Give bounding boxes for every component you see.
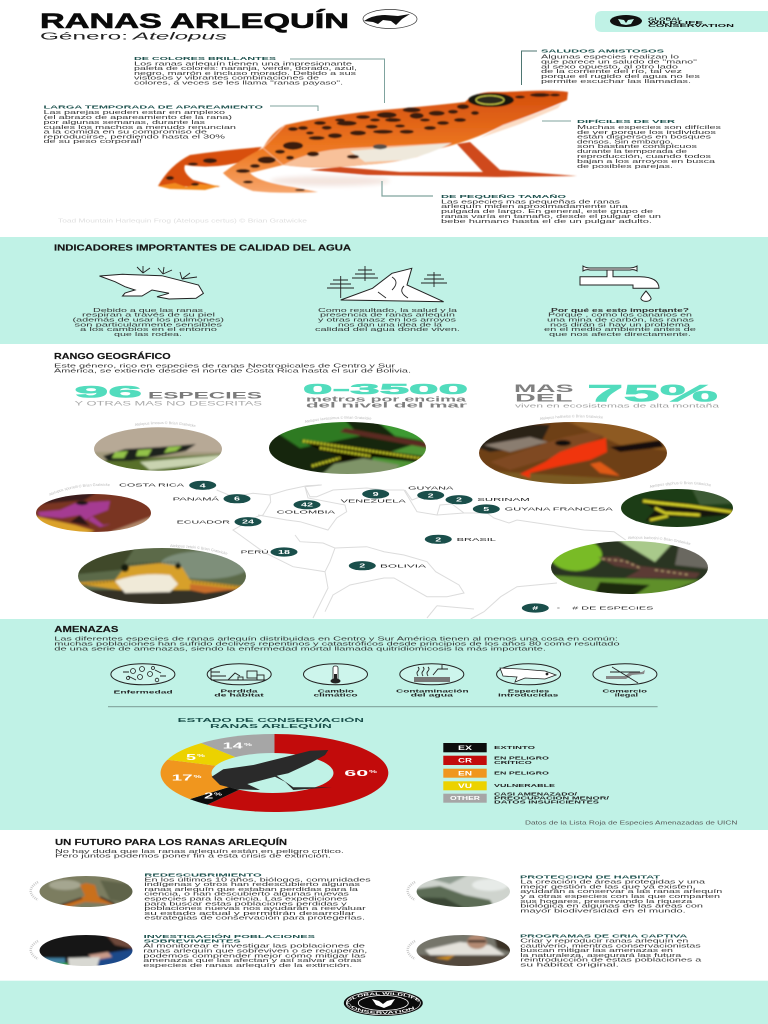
text: column 3: una mina de carbón, las ranas xyxy=(547,318,695,324)
callout: difíciles de ver: durante la temporada de xyxy=(577,149,687,155)
legend: conservation categories: EN PELIGRO xyxy=(494,756,550,760)
threat labels: Especies xyxy=(508,688,550,694)
stat: 0-3500 metros: 0-3500 xyxy=(303,381,468,398)
photo: purple frog: Atelopus spurrelli © Brian Gratwicke xyxy=(50,483,110,496)
logo: round seal: GLOBAL WILDLIFE xyxy=(347,992,420,1002)
text: redescubrimiento: especies para la ciencia. Las expediciones xyxy=(144,896,349,902)
callout: difíciles de ver: de posibles parejas. xyxy=(577,164,673,170)
stat: más del 75%: DEL xyxy=(515,392,573,404)
photo: misty forest xyxy=(406,876,510,907)
callout: difíciles de ver: están dispersos en bosques xyxy=(577,135,712,141)
percentage labels: 60 xyxy=(344,768,369,778)
stat: 96 especies: Y OTRAS MAS NO DESCRITAS xyxy=(74,401,263,408)
photo: green and black frog xyxy=(94,421,222,471)
text: column 2: Como resultado, la salud y la xyxy=(318,308,457,314)
stat: 0-3500 metros xyxy=(303,381,468,410)
text: investigación poblaciones sobrevivientes: SOBREVIVIENTES xyxy=(144,938,241,943)
threat labels: del agua xyxy=(411,693,454,699)
map labels and species count pins: BOLIVIA xyxy=(380,564,428,570)
callout: de colores brillantes: colores, a veces se les llama "ranas payaso". xyxy=(134,80,343,86)
text: protección de hábitat: La creación de áreas protegidas y una xyxy=(520,880,705,886)
legend: conservation categories: CR xyxy=(458,758,473,765)
pin: guyana francesa xyxy=(473,504,500,514)
pin: ecuador xyxy=(234,517,262,526)
percentage labels: % xyxy=(244,742,252,747)
callout: de pequeño tamaño: Las especies mas pequeñas de ranas xyxy=(441,199,621,205)
legend: conservation categories: VU xyxy=(458,783,473,790)
text: range description xyxy=(54,363,411,374)
pin: brasil: 2 xyxy=(435,537,441,543)
threat labels: Cambio xyxy=(318,688,354,694)
text: column 3: que nos afecte directamente. xyxy=(549,332,691,338)
threat labels xyxy=(114,688,647,699)
callout: saludos amistosos: porque el rugido del agua no les xyxy=(541,74,701,80)
pin: venezuela xyxy=(362,489,389,499)
text: column 1: (además de usar los pulmones) xyxy=(72,318,225,324)
logo badge: Global Wildlife Conservation: CONSERVATION xyxy=(648,23,734,28)
callout: larga temporada de apareamiento: a la comida en su compromiso de xyxy=(44,130,207,136)
photo caption: Toad Mountain Harlequin Frog (Atelopus certus) © Brian Gratwicke xyxy=(58,218,307,225)
stat: 0-3500 metros: metros por encima xyxy=(306,395,468,404)
pin: colombia: 42 xyxy=(301,503,313,509)
map of Central and South America xyxy=(217,485,626,619)
chart heading: ESTADO DE CONSERVACIÓN xyxy=(178,716,364,724)
pin: surinam: 2 xyxy=(456,498,462,504)
map labels and species count pins xyxy=(119,481,653,613)
photo: red bellied frog: Atelopus halihelos © Brian Gratwicke xyxy=(540,414,603,420)
threat labels: Comercio xyxy=(602,688,647,694)
title: Género: xyxy=(40,30,128,42)
icon: especies introducidas xyxy=(497,664,561,685)
pin: perú: 18 xyxy=(278,550,290,556)
threat labels: de hábitat xyxy=(214,693,265,699)
pin: colombia xyxy=(294,500,320,509)
text: redescubrimiento: REDESCUBRIMIENTO xyxy=(144,872,263,877)
text: programas de cría captiva: Criar y reproducir ranas arlequín en xyxy=(520,939,689,945)
text: column 3 xyxy=(544,308,696,338)
chart heading: RANAS ARLEQUÍN xyxy=(210,722,332,730)
pin: bolivia xyxy=(349,561,376,570)
text: protección de hábitat: mayor biodiversidad en el mundo. xyxy=(520,908,686,914)
callout: difíciles de ver: reproducción, cuando todos xyxy=(577,154,712,160)
donut chart: conservation status xyxy=(161,734,388,812)
map labels and species count pins: BRASIL xyxy=(457,537,497,543)
text: column 1: que las rodea. xyxy=(114,332,182,338)
map labels and species count pins: ECUADOR xyxy=(177,519,231,525)
text: investigación poblaciones sobrevivientes: ranas arlequín que sobreviven o se recuperan, xyxy=(143,948,367,954)
pin: bolivia: 2 xyxy=(359,564,365,570)
icon: frog breathing through skin xyxy=(100,266,203,299)
text: investigación poblaciones sobrevivientes: especies de ranas arlequín de la extinción. xyxy=(143,963,352,969)
threat labels: climático xyxy=(314,693,358,699)
stat: más del 75%: 75% xyxy=(587,381,719,408)
icon: frog in oval xyxy=(363,10,417,28)
percentage labels xyxy=(172,740,377,800)
source note: Datos de la Lista Roja de Especies Amenazadas de UICN xyxy=(525,821,738,827)
text: threats intro: de una serie de amenazas, siendo la enfermedad mortal llamada quitridiomicosis la más importante. xyxy=(54,646,546,652)
text: future intro xyxy=(55,849,344,860)
icon: cambio climático xyxy=(304,664,368,685)
pin: perú xyxy=(270,547,298,557)
text: column 2 xyxy=(315,308,460,333)
callout: de pequeño tamaño: arlequín miden aproximadamente una xyxy=(441,204,628,210)
stat: más del 75%: viven en ecosistemas de alta montaña xyxy=(515,403,721,409)
text: investigación poblaciones sobrevivientes: amenazas que las afectan y así salvar a otras xyxy=(143,958,363,964)
pin: costa rica: 4 xyxy=(200,483,207,489)
panel: footer xyxy=(0,980,768,1024)
callout: de colores brillantes: vistosos y vibrantes combinaciones de xyxy=(134,76,319,82)
text: investigación poblaciones sobrevivientes: Al monitorear e investigar las poblaciones de xyxy=(143,944,365,950)
map labels and species count pins: VENEZUELA xyxy=(341,499,408,505)
pin: panamá xyxy=(224,494,250,503)
text: programas de cría captiva: cautiverio, mientras conservacionistas xyxy=(520,944,702,950)
photo: red bellied frog xyxy=(479,414,667,484)
callout: difíciles de ver xyxy=(577,117,722,170)
legend: conservation categories: VULNERABLE xyxy=(494,783,555,788)
legend: number of species: = xyxy=(557,606,560,611)
photo: yellow striped frog: Atelopus glyphus © Brian Gratwicke xyxy=(650,481,711,488)
callout: de colores brillantes: DE COLORES BRILLANTES xyxy=(134,56,276,61)
heading: indicadores: INDICADORES IMPORTANTES DE CALIDAD DEL AGUA xyxy=(54,243,351,253)
callout: larga temporada de apareamiento: Las parejas pueden estar en amplexo xyxy=(44,110,225,116)
text: future intro: No hay duda que las ranas arlequín están en peligro crítico. xyxy=(55,849,344,855)
threat labels: introducidas xyxy=(498,693,559,699)
logo badge: Global Wildlife Conservation xyxy=(595,11,768,32)
callout: de colores brillantes: negro, marrón e incluso morado. Debido a sus xyxy=(134,71,357,77)
photo: golden frog: Atelopus zeteki © Brian Gratwicke xyxy=(170,544,228,555)
percentage labels: % xyxy=(214,792,222,796)
callout: saludos amistosos: al sexo opuesto, al otro lado xyxy=(541,64,678,70)
photo: yellow striped frog xyxy=(621,481,733,527)
logo: round seal: CONSERVATION xyxy=(346,1002,414,1014)
panel: water quality indicators xyxy=(0,237,768,344)
callout: de colores brillantes: paleta de colores: naranja, verde, dorado, azul, xyxy=(134,66,357,72)
callout: difíciles de ver: Muchas especies son difíciles xyxy=(577,125,722,131)
callout: de colores brillantes xyxy=(134,56,357,86)
frog silhouette xyxy=(212,750,332,790)
text: column 3: nos dirán si hay un problema xyxy=(550,322,690,328)
photo: rediscovered frog on rock xyxy=(30,876,132,907)
text: column 2: y otras ranasz en los arroyos xyxy=(318,318,457,324)
text: redescubrimiento: su estado actual y permitirán desarrollar xyxy=(144,911,356,917)
leader lines xyxy=(270,51,571,196)
text: protección de hábitat: sus hogares, preservando la riqueza xyxy=(520,899,693,905)
stat: más del 75%: MAS xyxy=(514,383,574,395)
callout: saludos amistosos: Algunas especies realizan lo xyxy=(541,55,679,61)
legend: conservation categories: EN PELIGRO xyxy=(494,770,550,775)
legend: conservation categories: OTHER xyxy=(450,796,481,802)
main frog illustration xyxy=(158,91,577,193)
callout: de pequeño tamaño xyxy=(441,193,661,225)
title xyxy=(40,10,349,42)
photo: golden frog xyxy=(78,544,246,604)
legend: conservation categories: EX xyxy=(458,745,473,752)
stat: 0-3500 metros: del nivel del mar xyxy=(306,400,467,410)
callout: difíciles de ver: son bastante conspicuos xyxy=(577,144,698,150)
frog spots xyxy=(166,93,560,191)
pin: panamá: 6 xyxy=(234,497,240,503)
text: redescubrimiento: poblaciones nuevas nos ayudarán a reevaluar xyxy=(144,906,366,912)
text: redescubrimiento: En los últimos 10 años, biólogos, comunidades xyxy=(144,877,372,883)
callout: de pequeño tamaño: pulgada de largo. En general, este grupo de xyxy=(441,209,653,215)
pin: guyana francesa: 5 xyxy=(483,507,489,513)
heading: rango geográfico: RANGO GEOGRÁFICO xyxy=(54,350,171,361)
callout: saludos amistosos: permite escuchar las llamadas. xyxy=(541,79,691,85)
icon: contaminación del agua xyxy=(400,664,464,685)
legend: conservation categories xyxy=(443,743,611,804)
legend: conservation categories: EXTINTO xyxy=(494,745,536,750)
text: programas de cría captiva: PROGRAMAS DE CRIA CAPTIVA xyxy=(520,934,689,939)
percentage labels: % xyxy=(194,774,202,779)
text: column 1 xyxy=(72,308,225,338)
percentage labels: % xyxy=(197,753,205,758)
callout: larga temporada de apareamiento: por algunas semanas, durante las xyxy=(44,120,206,126)
stat: 96 especies: ESPECIES xyxy=(148,390,262,401)
map labels and species count pins: COLOMBIA xyxy=(277,510,337,516)
panel: threats and conservation status xyxy=(0,619,768,830)
icon: river and trees xyxy=(327,266,447,302)
callout: larga temporada de apareamiento xyxy=(44,104,264,145)
text: redescubrimiento: ciencia, o han descubierto algunas nuevas xyxy=(144,892,350,898)
text: investigación poblaciones sobrevivientes: podemos comprender mejor cómo mitigar las xyxy=(143,953,367,959)
percentage labels: % xyxy=(369,769,377,774)
percentage labels: 5 xyxy=(186,752,197,762)
text: protección de hábitat: PROTECCION DE HABITAT xyxy=(520,875,660,880)
stat: 96 especies xyxy=(74,382,263,408)
text: column 1: a los cambios en el entorno xyxy=(80,327,217,333)
text: investigación poblaciones sobrevivientes: INVESTIGACIÓN POBLACIONES xyxy=(144,932,315,939)
pin: venezuela: 9 xyxy=(373,492,379,498)
text: range description: Este género, rico en especies de ranas Neotropicales de Centro y Sur xyxy=(54,363,396,369)
threat labels: Enfermedad xyxy=(114,690,173,696)
legend: conservation categories: DATOS INSUFICIENTES xyxy=(494,800,599,804)
callout: difíciles de ver: densos. Sin embargo, xyxy=(577,140,673,146)
logo: round seal xyxy=(344,990,423,1016)
logo badge: Global Wildlife Conservation: WILDLIFE xyxy=(648,20,703,25)
text: threats intro: muchas poblaciones han sufrido declives repentinos y catastróficos desde principios de los años 80 como resultado xyxy=(54,642,620,648)
map labels and species count pins: PERÚ xyxy=(241,548,270,555)
text: range description: América, se extiende desde el norte de Costa Rica hasta el sur de Bolivia. xyxy=(54,368,411,374)
legend: conservation categories: CASI AMENAZADO/ xyxy=(494,792,578,797)
photo: green and black frog: Atelopus limosus © Brian Gratwicke xyxy=(135,421,196,427)
callout: difíciles de ver: bajan a los arroyos en busca xyxy=(577,159,715,165)
text: protección de hábitat: mejor gestión de las que ya existen, xyxy=(520,884,696,890)
pin: ecuador: 24 xyxy=(242,520,256,526)
percentage labels: 14 xyxy=(223,740,243,750)
text: column 2: calidad del agua donde viven. xyxy=(315,327,460,333)
callout: saludos amistosos: que parece un saludo de "mano" xyxy=(541,60,697,66)
stat: más del 75% xyxy=(514,381,721,409)
map labels and species count pins: PANAMÁ xyxy=(173,495,221,502)
text: programas de cría captiva: su hábitat original. xyxy=(520,962,619,968)
callout: larga temporada de apareamiento: (el abrazo de apareamiento de la rana) xyxy=(44,115,233,121)
legend: number of species: # xyxy=(532,606,540,612)
text: redescubrimiento: estrategias de conservación para protegerlas. xyxy=(144,916,365,922)
callout: larga temporada de apareamiento: reproducirse, perdiendo hasta el 30% xyxy=(44,134,226,140)
callout: difíciles de ver: DIFÍCILES DE VER xyxy=(577,117,676,124)
text: redescubrimiento xyxy=(144,872,372,922)
map labels and species count pins: GUYANA xyxy=(408,485,455,491)
chart heading xyxy=(178,716,364,730)
text: programas de cría captiva xyxy=(520,934,702,968)
percentage labels: 17 xyxy=(172,773,193,783)
callout: saludos amistosos xyxy=(541,49,701,85)
text: redescubrimiento: indígenas y otros han redescubierto algunas xyxy=(144,882,361,888)
stat: 96 especies: 96 xyxy=(74,382,142,401)
logo badge: Global Wildlife Conservation: GLOBAL xyxy=(648,16,682,22)
text: protección de hábitat: biológica en algunas de las áreas con xyxy=(520,904,703,910)
text: threats intro: Las diferentes especies de ranas arlequín distribuidas en Centro y Sur América tienen al menos una cosa en común: xyxy=(54,637,618,643)
pin: guyana xyxy=(417,491,444,500)
text: column 1: Debido a que las ranas xyxy=(93,308,204,314)
callout: de pequeño tamaño: bebe humano hasta el de un pulgar adulto. xyxy=(441,219,652,225)
heading: un futuro: UN FUTURO PARA LOS RANAS ARLEQUÍN xyxy=(55,837,287,847)
map labels and species count pins: COSTA RICA xyxy=(119,483,186,489)
pin: brasil xyxy=(425,535,452,544)
callout: difíciles de ver: de ver porque los individuos xyxy=(577,130,717,136)
legend: conservation categories: PREOCUPACIÓN MENOR/ xyxy=(494,794,611,800)
text: investigación poblaciones sobrevivientes xyxy=(143,932,367,969)
text: column 1: respiran a través de su piel xyxy=(82,313,215,319)
photo: captive breeding keeper xyxy=(406,935,510,966)
text: column 1: son particularmente sensibles xyxy=(74,322,223,328)
text: column 3: Porque , como los canarios en xyxy=(548,313,692,319)
callout: saludos amistosos: de la corriente del río, tal vez xyxy=(541,69,683,75)
icon: comercio ilegal xyxy=(593,664,657,685)
threat labels: ilegal xyxy=(615,693,638,699)
percentage labels: 2 xyxy=(204,790,214,800)
text: programas de cría captiva: buscan mitigar las amenazas en xyxy=(520,948,673,954)
text: column 3: Por qué es esto importante? xyxy=(551,308,689,314)
callout: de colores brillantes: Los ranas arlequín tienen una impresionante xyxy=(134,61,352,67)
text: protección de hábitat: y a otras especies con las que comparten xyxy=(520,894,720,900)
legend: conservation categories: CRÍTICO xyxy=(494,758,533,765)
pin: guyana: 2 xyxy=(428,493,434,499)
threat labels: Perdida xyxy=(220,688,258,694)
pin: costa rica xyxy=(189,481,216,490)
text: future intro: Pero juntos podemos poner fin a esta crisis de extinción. xyxy=(55,854,331,860)
photo: black frog with yellow dots xyxy=(269,416,426,474)
legend: conservation categories: EN xyxy=(458,770,473,778)
legend: number of species xyxy=(522,603,653,613)
heading: amenazas: AMENAZAS xyxy=(54,624,119,634)
photo: brown frog on leaves: Atelopus barbotini © Brian Gratwicke xyxy=(628,536,690,545)
text: programas de cría captiva: reintroducción de estas poblaciones a xyxy=(520,958,702,964)
text: column 2: nos dan una idea de la xyxy=(338,322,442,328)
text: column 2: presencia de ranas arlequín xyxy=(320,313,455,319)
title: RANAS ARLEQUÍN xyxy=(40,10,349,33)
photo: brown frog on leaves xyxy=(551,536,708,594)
photo: purple frog xyxy=(36,483,151,532)
text: protección de hábitat: ayudarán a conservar a las ranas arlequín xyxy=(520,889,723,895)
icon: pérdida de hábitat xyxy=(207,664,271,685)
title: Atelopus xyxy=(131,30,229,42)
icon: dripping tap xyxy=(580,266,659,301)
pin: surinam xyxy=(446,495,472,504)
callout: de pequeño tamaño: ranas varía en tamaño, desde el pulgar de un xyxy=(441,214,661,220)
photo: researcher monitoring xyxy=(30,935,132,966)
threat labels: Contaminación xyxy=(396,688,469,694)
frog eye xyxy=(468,93,514,107)
text: threats intro xyxy=(54,637,620,652)
map labels and species count pins: SURINAM xyxy=(477,497,530,503)
text: redescubrimiento: para buscar estas poblaciones perdidas y xyxy=(144,901,348,907)
callout: de pequeño tamaño: DE PEQUEÑO TAMAÑO xyxy=(441,193,567,199)
map labels and species count pins: GUYANA FRANCESA xyxy=(505,506,615,512)
callout: larga temporada de apareamiento: cuales los machos a menudo renuncian xyxy=(44,125,236,131)
text: programas de cría captiva: la naturaleza, asegurará las futura xyxy=(520,953,682,959)
icon: enfermedad xyxy=(111,664,175,685)
text: column 3: en el medio ambiente antes de xyxy=(544,327,696,333)
legend: number of species: # DE ESPECIES xyxy=(572,605,653,611)
callout: saludos amistosos: SALUDOS AMISTOSOS xyxy=(541,49,664,54)
callout: larga temporada de apareamiento: de su peso corporal! xyxy=(44,139,142,145)
callout: larga temporada de apareamiento: LARGA TEMPORADA DE APAREAMIENTO xyxy=(44,104,264,110)
text: protección de hábitat xyxy=(520,875,723,914)
photo: black frog with yellow dots: Atelopus laetissimus © Brian Gratwicke xyxy=(304,416,372,423)
text: redescubrimiento: ranas arlequín que estaban perdidas para la xyxy=(144,887,358,893)
